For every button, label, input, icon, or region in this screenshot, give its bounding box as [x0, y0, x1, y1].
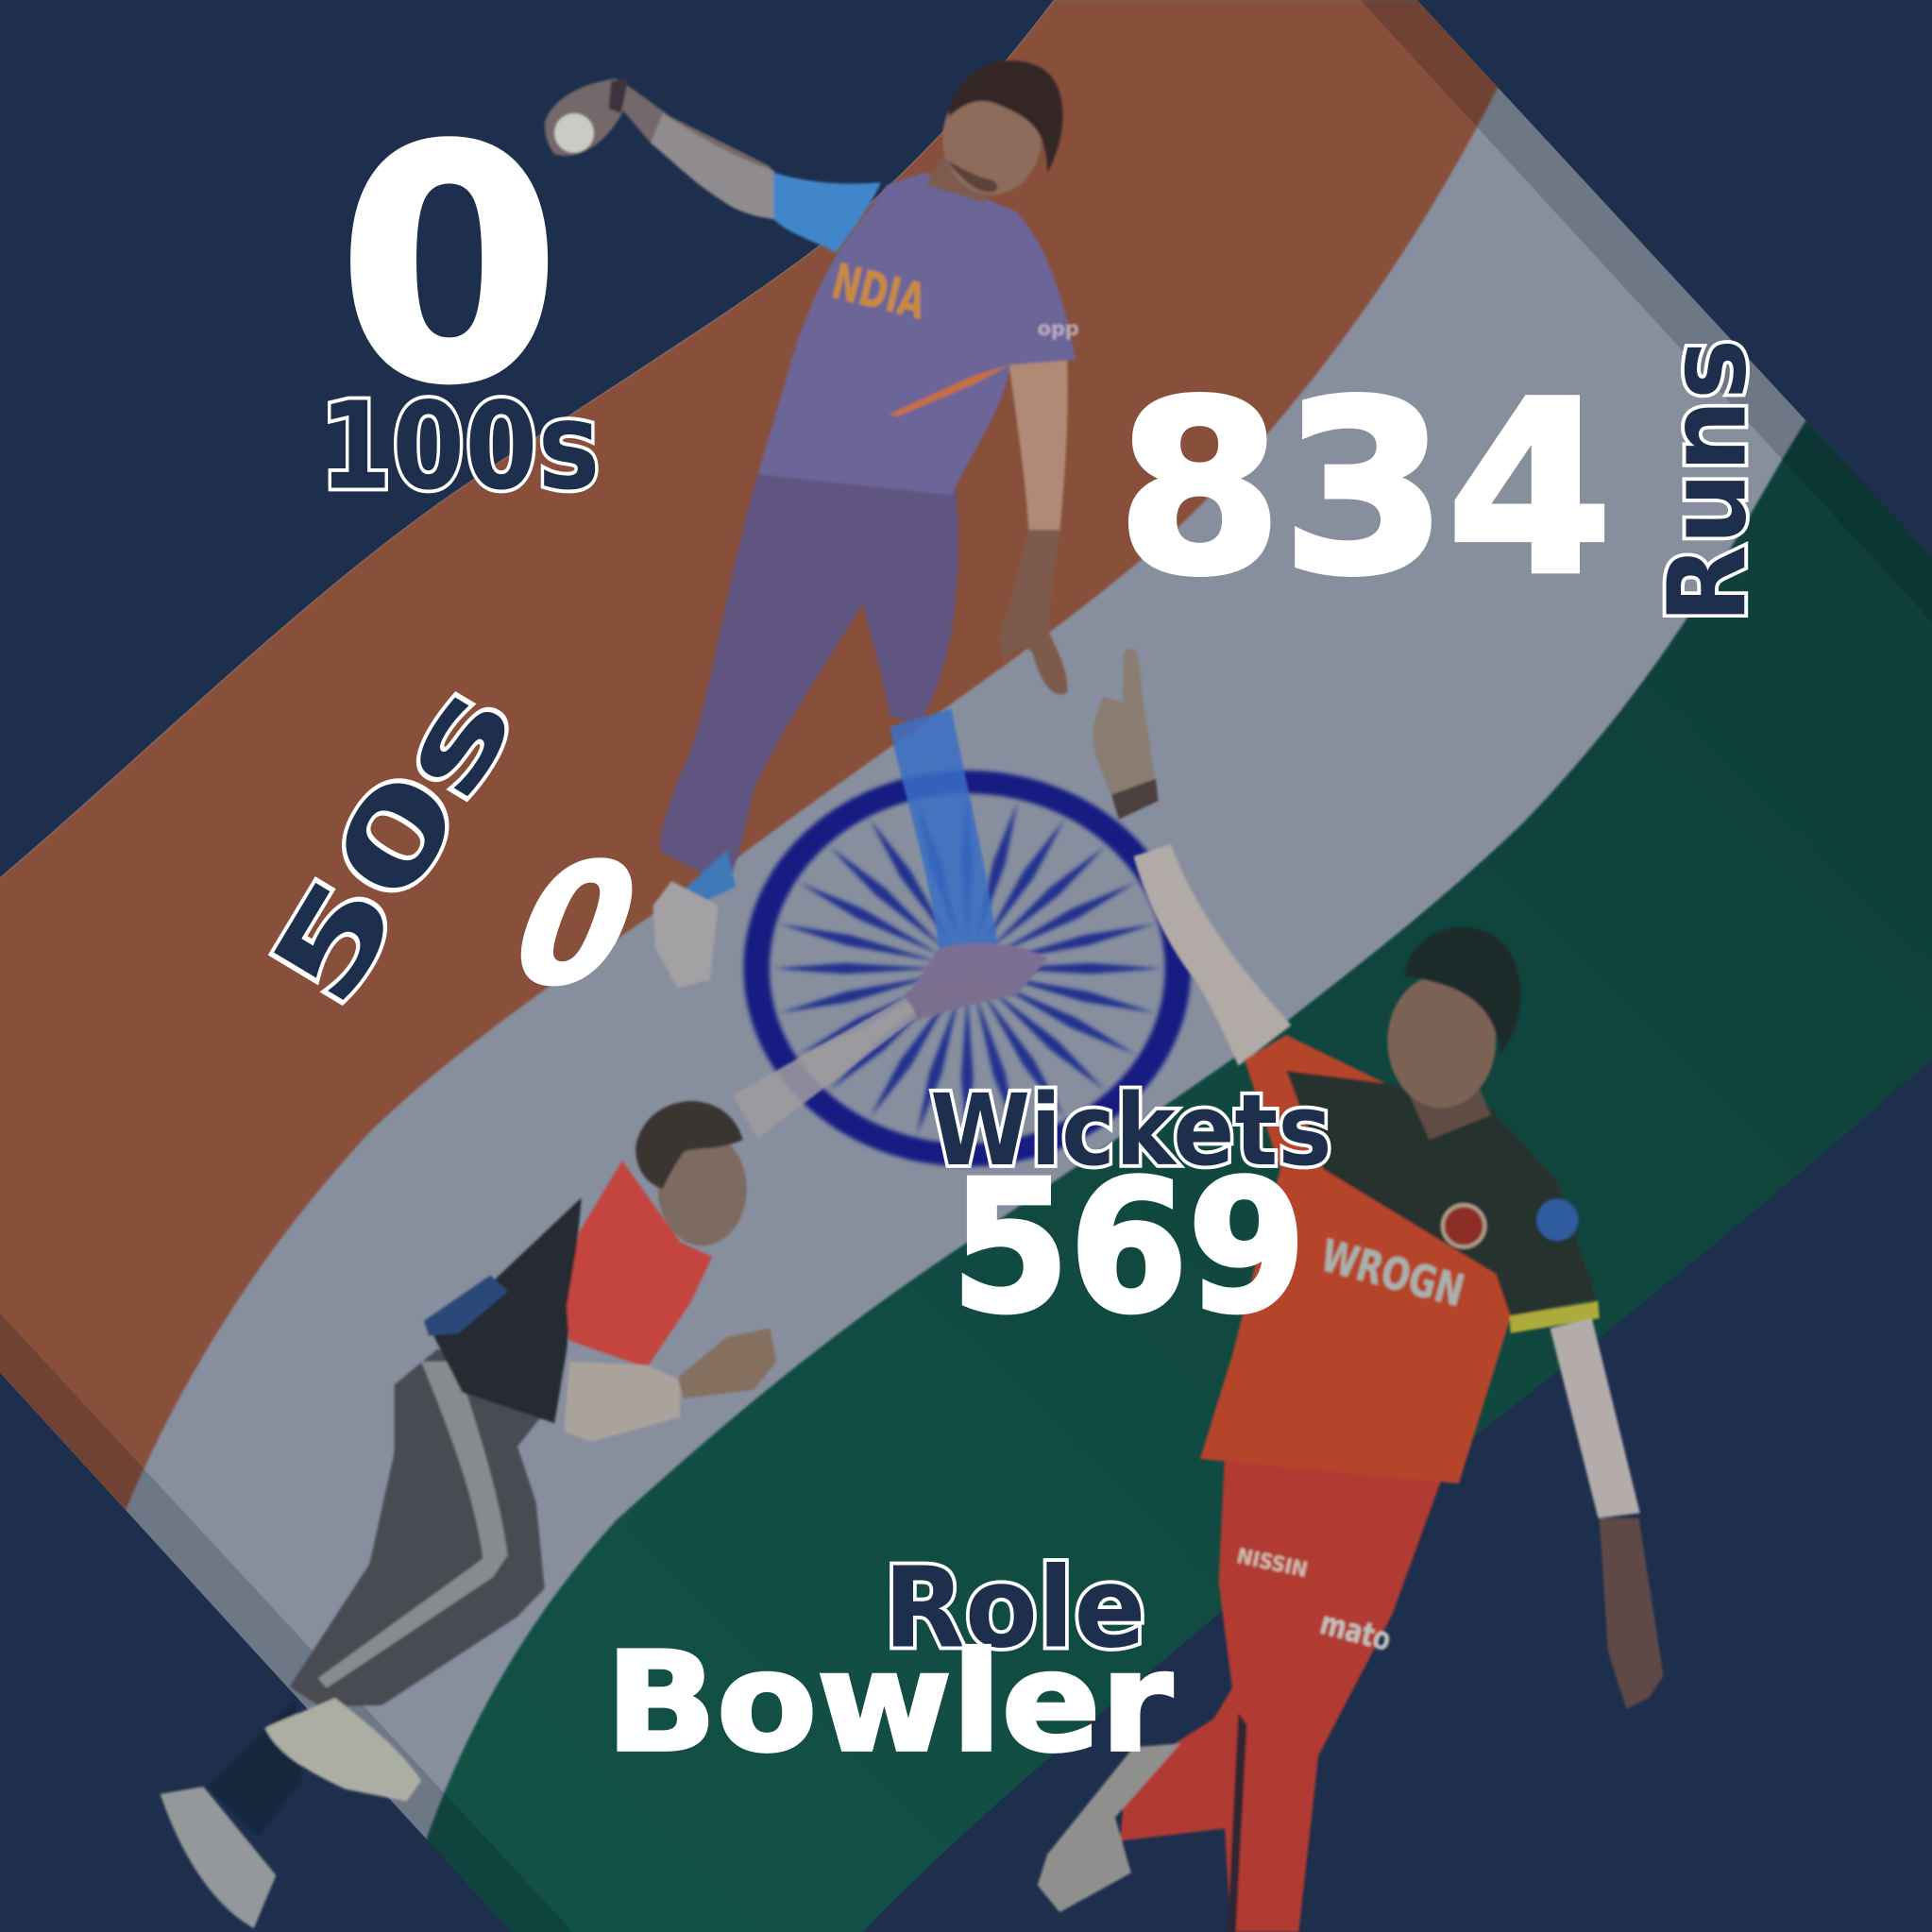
value: 834	[1117, 351, 1612, 627]
hair	[949, 60, 1062, 173]
backpack strap	[424, 1276, 508, 1335]
chakra wheel	[756, 782, 1178, 1155]
stat: 50s	[245, 660, 665, 1028]
fist	[678, 1329, 776, 1398]
chest stripe	[890, 364, 1010, 416]
logo on sleeve: opp	[1038, 317, 1079, 340]
top right frame band	[1361, 0, 1932, 622]
value: 0	[486, 828, 665, 1022]
face	[942, 81, 1042, 195]
face	[1387, 974, 1496, 1108]
value: 0	[338, 80, 560, 453]
hair	[1405, 927, 1520, 1054]
face	[658, 1132, 747, 1246]
stat: role	[605, 1543, 1173, 1783]
nissin patch: NISSIN	[1235, 1544, 1310, 1583]
arm sleeve	[651, 113, 776, 219]
trouser cuff	[680, 850, 736, 902]
player: red and black delivery stride	[161, 967, 1023, 1928]
jersey	[757, 173, 1076, 496]
saffron band	[0, 0, 1602, 1516]
lower back leg	[207, 1698, 302, 1836]
value: Bowler	[605, 1624, 1173, 1783]
shirt yoke	[1286, 1071, 1597, 1317]
side logo: mato	[1316, 1604, 1395, 1658]
sleeve trim	[1509, 1301, 1600, 1333]
wrist band	[1111, 779, 1159, 820]
right hand	[1000, 530, 1067, 694]
label: 100s	[319, 377, 600, 517]
player: India jersey bowler	[545, 60, 1079, 1013]
forearm	[1600, 1518, 1664, 1709]
label: 50s	[245, 660, 543, 1028]
shorts and trousers	[1120, 1454, 1444, 1932]
arm sleeve	[1550, 1318, 1640, 1518]
black torso	[432, 1197, 582, 1423]
ball	[554, 113, 594, 153]
raised arm	[545, 79, 773, 219]
raised arm sleeve	[1133, 844, 1291, 1066]
jersey badge	[1443, 1205, 1484, 1247]
trouser stripe	[318, 1362, 508, 1688]
label: Wickets	[930, 1073, 1332, 1188]
shoe back	[161, 1787, 276, 1928]
label: Role	[884, 1543, 1146, 1672]
neck	[926, 154, 1004, 203]
shoe	[1038, 1743, 1180, 1912]
neck	[1405, 1072, 1491, 1140]
chakra spokes	[772, 796, 1161, 1141]
lower leg	[890, 708, 998, 949]
value: 569	[951, 1143, 1306, 1353]
hair	[636, 1101, 743, 1189]
shoe left	[653, 881, 719, 988]
right arm	[1008, 357, 1068, 533]
trousers	[290, 1349, 561, 1706]
sponsor text on jersey: NDIA	[826, 254, 931, 331]
lower arm	[565, 1362, 680, 1442]
stat: 100s	[319, 80, 600, 517]
bottom left frame band	[0, 1313, 573, 1932]
jio badge	[1536, 1199, 1579, 1241]
raised arm	[733, 997, 918, 1139]
trousers	[659, 474, 958, 887]
chakra rim	[756, 782, 1178, 1155]
label: Runs	[1646, 339, 1771, 623]
shirt	[1200, 1035, 1597, 1483]
stat: runs	[1117, 339, 1771, 627]
raised finger	[1093, 648, 1156, 807]
shoe front	[265, 1698, 421, 1802]
red jersey	[567, 1161, 712, 1367]
sponsor on shirt: WROGN	[1315, 1229, 1469, 1317]
trouser dark stripe	[1228, 1713, 1247, 1932]
wrist bands	[609, 79, 628, 113]
hand over wheel	[906, 967, 1023, 1020]
blue sleeve	[773, 173, 881, 252]
green band	[134, 421, 1932, 1932]
facial hair	[946, 161, 997, 193]
stat: wickets	[930, 1073, 1332, 1353]
shoe right	[906, 943, 1047, 1013]
player: red kit with finger raised	[1038, 648, 1664, 1932]
